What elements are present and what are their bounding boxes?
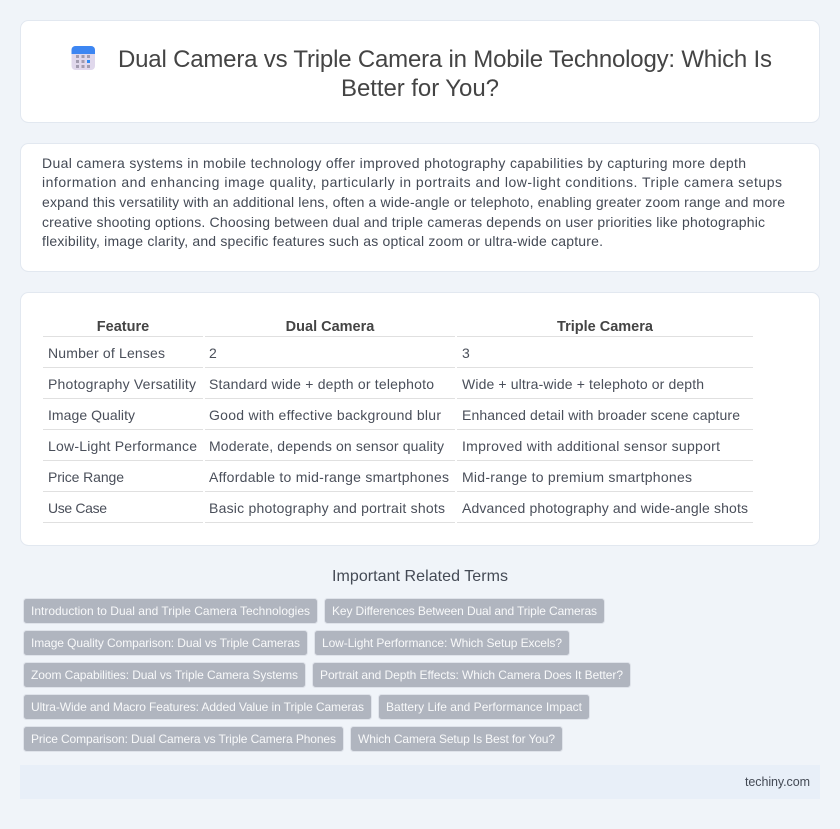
table header [97, 319, 654, 335]
panel: introduction text [20, 144, 820, 272]
row: use case: Basic photography and portrait shots [209, 500, 445, 516]
heading: important related terms: Important Related Terms [332, 568, 508, 585]
tag row 4: Ultra-Wide and Macro Features: Added Value in Triple Cameras [31, 700, 364, 714]
row: photography versatility: Wide + ultra-wide + telephoto or depth [462, 376, 704, 392]
row: use case [48, 500, 748, 516]
footer: techiny.com [745, 775, 810, 789]
table header: Dual Camera [286, 319, 375, 335]
row: low-light performance [48, 438, 720, 454]
tag row 3: Zoom Capabilities: Dual vs Triple Camera Systems [31, 668, 298, 682]
row: number of lenses: 2 [209, 345, 217, 361]
intro paragraph: information and enhancing image quality, particularly in portraits and low-light conditions. Triple camera setups [42, 174, 782, 190]
intro paragraph: Dual camera systems in mobile technology offer improved photography capabilities by capturing more depth [42, 155, 746, 171]
footer [20, 765, 820, 799]
tag row 1 [24, 598, 604, 624]
row: use case: Advanced photography and wide-angle shots [462, 500, 748, 516]
title: Better for You? [341, 75, 499, 102]
tag row 1: Key Differences Between Dual and Triple Cameras [332, 604, 597, 618]
row: price range: Mid-range to premium smartphones [462, 469, 692, 485]
tag row 3 [24, 662, 630, 688]
row: low-light performance: Improved with additional sensor support [462, 438, 720, 454]
tag row 2 [24, 630, 570, 656]
table header: Triple Camera [557, 319, 654, 335]
row: use case: Use Case [48, 500, 107, 516]
row: photography versatility: Photography Versatility [48, 376, 196, 392]
row: low-light performance: Low-Light Performance [48, 438, 197, 454]
row: price range [48, 469, 692, 485]
tag row 2: Low-Light Performance: Which Setup Excels? [322, 636, 562, 650]
header panel [20, 20, 820, 122]
row: image quality: Image Quality [48, 407, 135, 423]
tag row 5: Which Camera Setup Is Best for You? [358, 732, 555, 746]
tag row 5 [24, 726, 562, 752]
related terms tags [24, 598, 630, 752]
icon: calendar [72, 46, 95, 70]
row: image quality [48, 407, 740, 423]
tag row 1: Introduction to Dual and Triple Camera Technologies [31, 604, 310, 618]
row: price range: Affordable to mid-range smartphones [209, 469, 449, 485]
row: price range: Price Range [48, 469, 124, 485]
title [118, 46, 772, 102]
tag row 2: Image Quality Comparison: Dual vs Triple Cameras [31, 636, 300, 650]
row: number of lenses: Number of Lenses [48, 345, 165, 361]
row: photography versatility: Standard wide + depth or telephoto [209, 376, 434, 392]
row: number of lenses [48, 345, 470, 361]
panel: comparison table [20, 292, 820, 546]
row: image quality: Good with effective background blur [209, 407, 441, 423]
intro paragraph: expand this versatility with an additional lens, often a wide-angle or telephoto, enabling greater zoom range and more [42, 194, 785, 210]
row: low-light performance: Moderate, depends on sensor quality [209, 438, 444, 454]
intro paragraph [42, 155, 785, 249]
row: image quality: Enhanced detail with broader scene capture [462, 407, 740, 423]
intro paragraph: creative shooting options. Choosing between dual and triple cameras depends on user priorities like photographic [42, 214, 765, 230]
table header: Feature [97, 319, 149, 335]
tag row 5: Price Comparison: Dual Camera vs Triple Camera Phones [31, 732, 336, 746]
tag row 4 [24, 694, 590, 720]
intro paragraph: flexibility, image clarity, and specific features such as optical zoom or ultra-wide capture. [42, 233, 603, 249]
tag row 4: Battery Life and Performance Impact [386, 700, 583, 714]
tag row 3: Portrait and Depth Effects: Which Camera Does It Better? [320, 668, 623, 682]
title: Dual Camera vs Triple Camera in Mobile Technology: Which Is [118, 46, 772, 73]
row: photography versatility [48, 376, 704, 392]
row: number of lenses: 3 [462, 345, 470, 361]
